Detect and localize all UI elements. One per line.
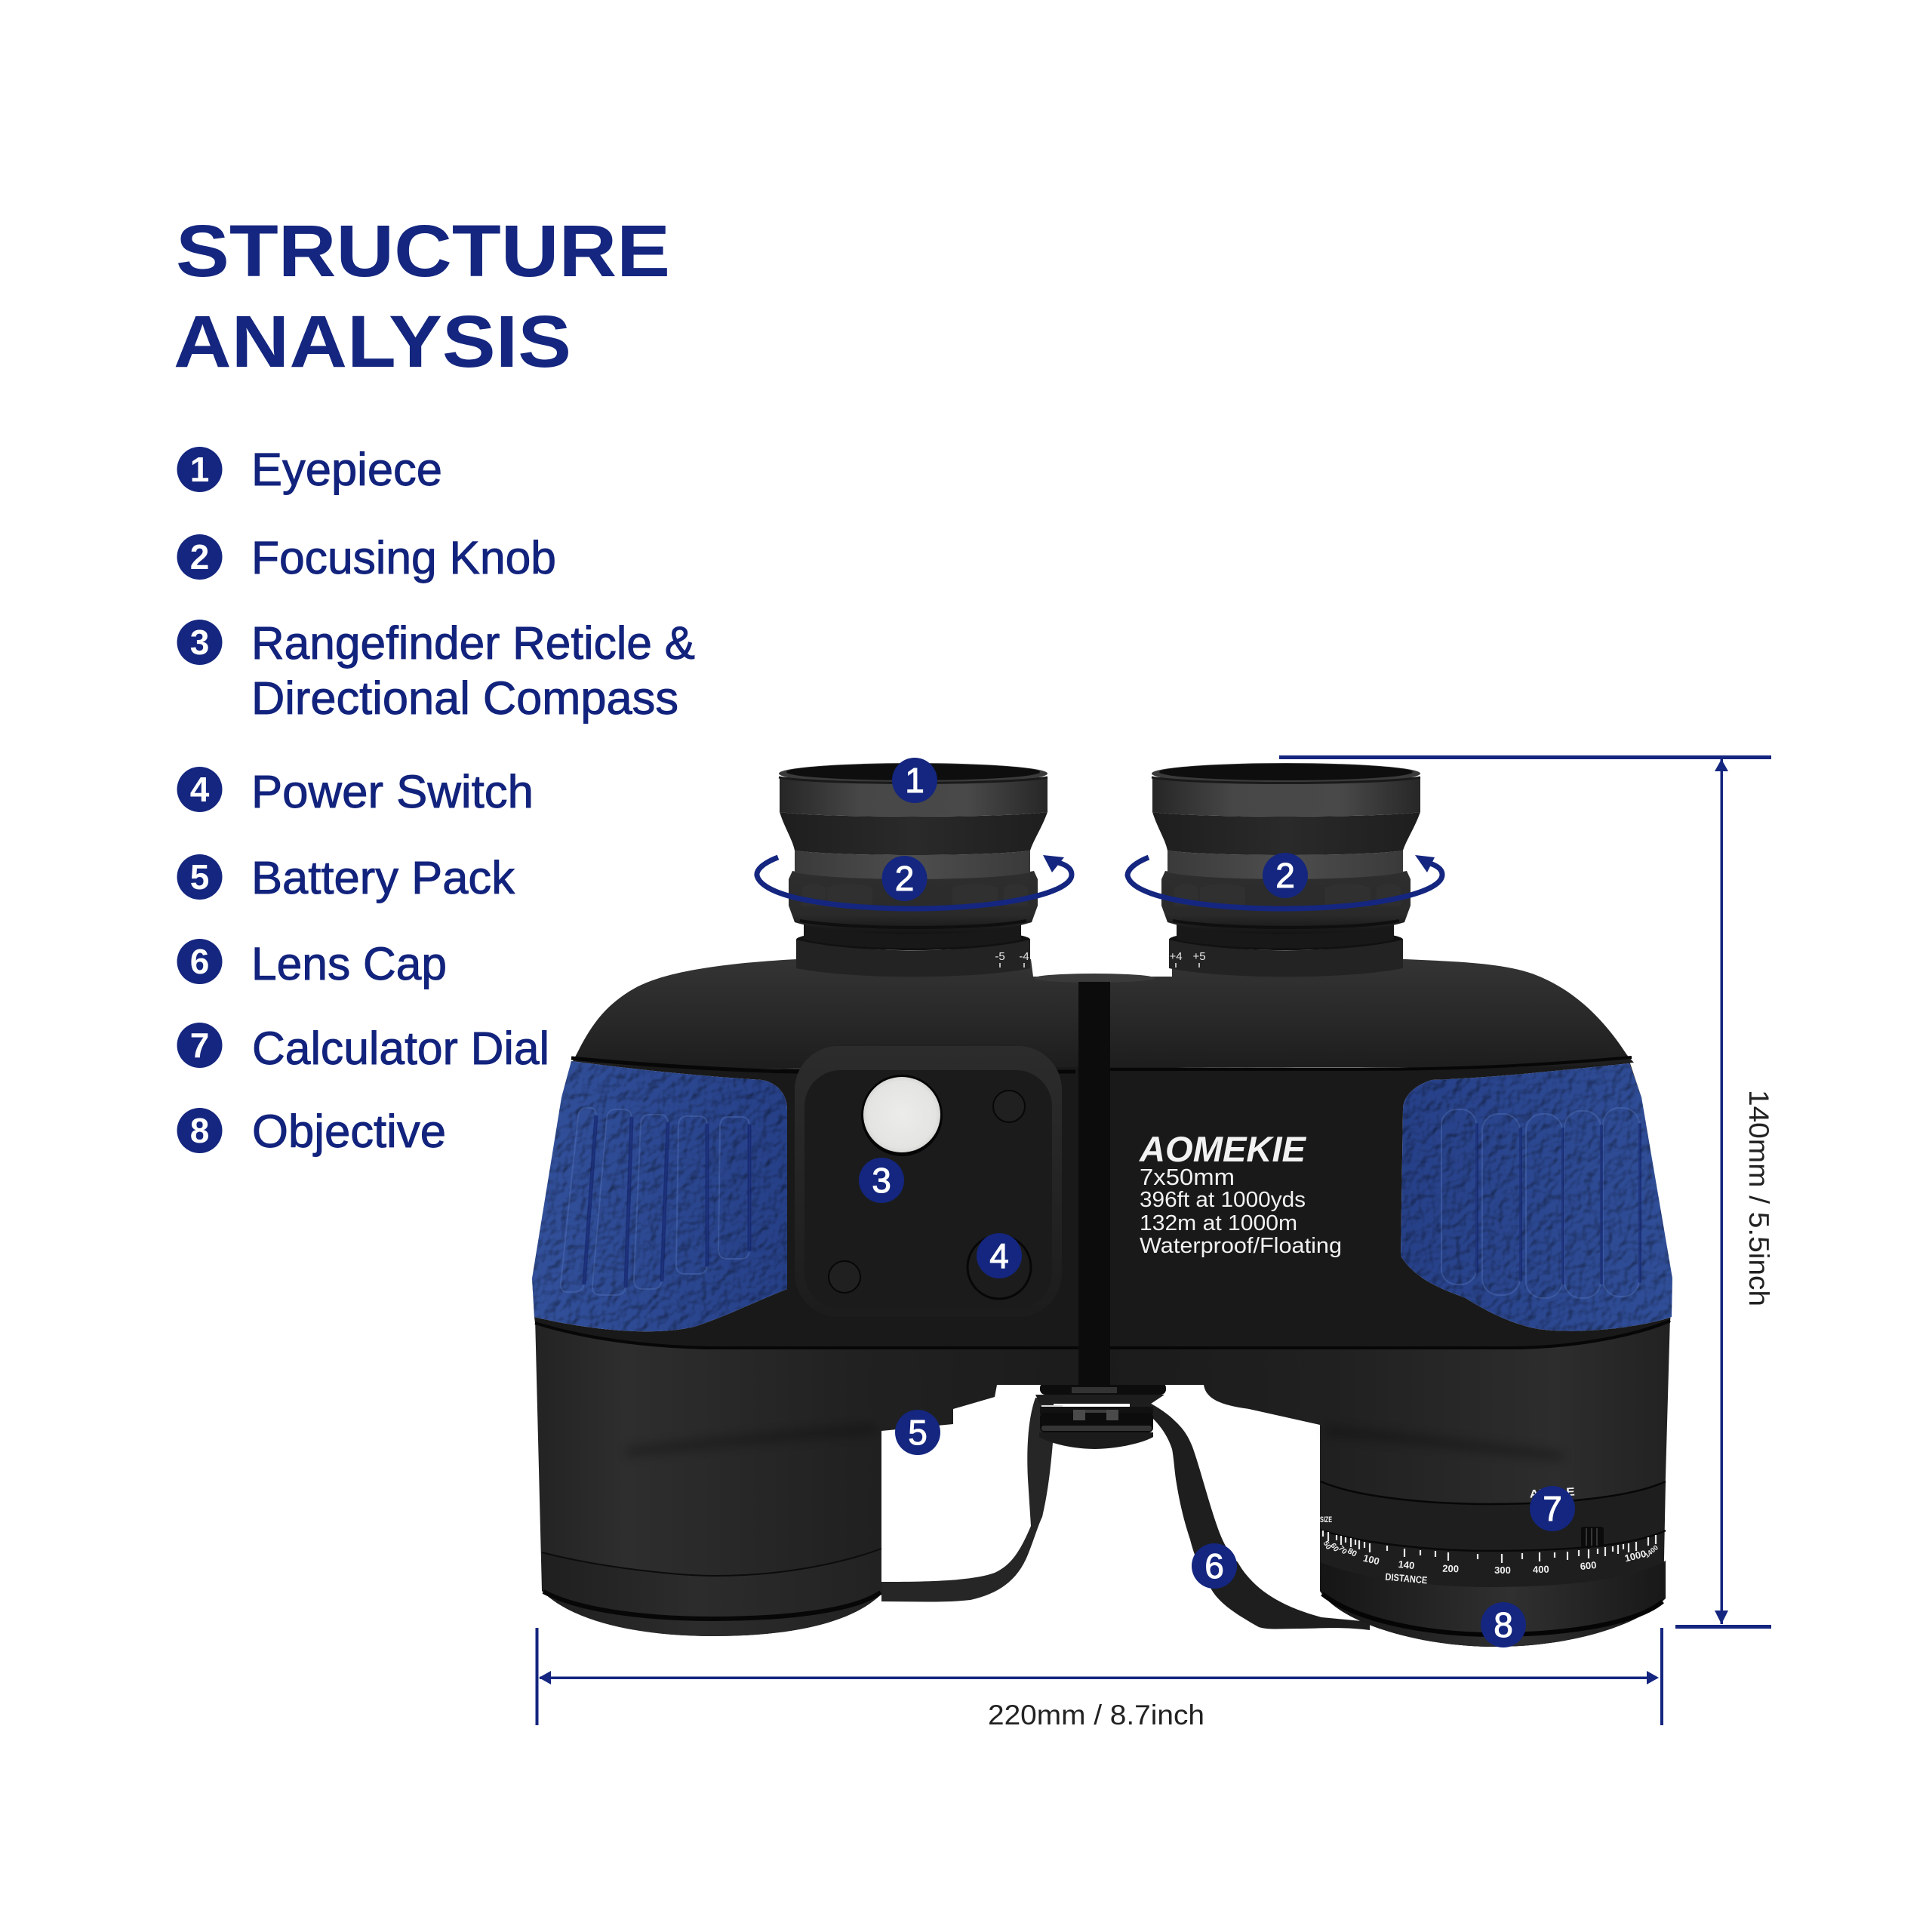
screw top right [993,1091,1025,1122]
brand and specification text: 396ft at 1000yds [1140,1188,1306,1212]
legend item 4: Power Switch [251,766,534,817]
diopter scale marks [995,950,1206,968]
diopter scale marks: -5 [995,950,1005,963]
callout badge 1 [892,758,937,803]
legend item 8: Objective [252,1106,446,1157]
legend item 3: 3 [190,623,209,662]
binoculars illustration [532,763,1672,1647]
callout badge 2 right [1263,853,1308,898]
brand and specification text: Waterproof/Floating [1140,1234,1342,1258]
body mid section [532,1061,1672,1348]
left eyepiece [779,763,1048,977]
callout badge 7: 7 [1543,1489,1562,1528]
callout badge 8 [1481,1602,1526,1647]
distance scale labels: 200 [1442,1563,1459,1574]
distance scale labels: 60 [1328,1542,1340,1554]
rotation arrow left [757,855,1072,909]
legend item 2: 2 [190,537,209,577]
distance scale labels: 50 [1321,1540,1333,1552]
body lower silhouette and barrels [535,1317,1670,1647]
distance scale labels: SIZE [1320,1515,1332,1524]
left objective cap band [542,1549,881,1636]
top centre disc [1034,974,1155,983]
legend list [177,444,695,1157]
callout badge 7 [1530,1486,1575,1531]
legend item 6: Lens Cap [251,938,447,989]
brand and specification text: 132m at 1000m [1140,1211,1297,1235]
callout badge 4 [977,1233,1022,1278]
title [174,210,670,383]
callout badge 6: 6 [1204,1546,1224,1586]
left blue grip [532,1061,787,1331]
title: STRUCTURE [176,210,670,292]
callout badge 2 left: 2 [895,859,914,898]
right lens cap strap [1130,1401,1370,1630]
power switch button [968,1235,1031,1299]
legend item 1: 1 [190,450,209,489]
callout badge 3 [859,1158,904,1203]
distance scale labels: 600 [1580,1559,1597,1572]
strap hinge [1035,1383,1166,1449]
callout badge 8: 8 [1494,1605,1513,1644]
left grip groove shadows [584,1117,749,1286]
left grip grooves [561,1108,749,1295]
callout badge 2 right: 2 [1275,856,1295,895]
height dimension: 140mm / 5.5inch [1743,1090,1774,1306]
brand and specification text: 7x50mm [1140,1164,1235,1190]
brand and specification text [1139,1129,1342,1258]
diopter scale marks: +4 [1169,950,1183,963]
legend item 6: 6 [190,942,209,981]
rotation arrow right [1128,855,1442,909]
distance scale labels: 400 [1533,1564,1549,1575]
legend item 5: 5 [190,857,209,897]
legend item 5: Battery Pack [251,852,515,903]
callout badge 4: 4 [989,1236,1009,1275]
distance scale labels: 1000 [1623,1548,1647,1564]
legend item 2: Focusing Knob [251,532,556,583]
seam lines [535,1057,1670,1348]
legend item 1: Eyepiece [251,444,442,495]
callout badge 2 left [881,856,927,901]
brand and specification text: AOMEKIE [1139,1129,1307,1169]
screw bottom left [829,1261,860,1293]
distance scale labels: 70 [1337,1544,1349,1556]
legend item 3 [177,617,695,724]
distance scale labels: 80 [1346,1546,1358,1559]
distance scale labels: DISTANCE [1385,1571,1428,1586]
distance scale labels [1320,1485,1660,1586]
callout badge 5 [895,1410,940,1455]
right eyepiece [1152,763,1420,977]
right calculator dial [1320,1481,1666,1647]
barrel shoulder shadow right [1326,1431,1562,1457]
legend item 3: Directional Compass [251,672,678,724]
width dimension: 220mm / 8.7inch [988,1700,1204,1730]
legend item 7: Calculator Dial [252,1023,549,1074]
right grip groove shadows [1477,1124,1640,1283]
left neck strap loop [881,1398,1054,1601]
compass plate [795,1046,1062,1317]
distance scale labels: 1400 [1643,1543,1660,1559]
distance scale labels: ANGLE [1529,1485,1575,1501]
width dimension [536,1628,1663,1730]
callout badge 3: 3 [872,1161,891,1200]
diopter scale marks: +5 [1192,950,1206,963]
right blue grip [1401,1063,1672,1331]
legend item 3: Rangefinder Reticle & [251,617,695,669]
distance scale labels: 140 [1398,1558,1415,1571]
legend item 4: 4 [190,770,210,809]
callout badge 5: 5 [908,1413,928,1452]
title: ANALYSIS [174,300,571,383]
distance scale ticks [1323,1531,1656,1563]
callout badge 1: 1 [905,761,924,800]
barrel shoulder shadow left [626,1429,875,1452]
legend item 7: 7 [190,1026,209,1065]
diopter scale marks: -4 [1019,950,1029,963]
rangefinder compass window [861,1075,943,1156]
body top shoulder [571,959,1634,1069]
right grip grooves [1441,1108,1639,1298]
centre hinge channel [1078,982,1110,1385]
distance scale labels: 100 [1362,1552,1380,1567]
distance scale labels: 300 [1494,1564,1511,1576]
callout badge 6 [1192,1543,1237,1589]
legend item 8: 8 [190,1111,209,1150]
height dimension [1279,755,1774,1629]
